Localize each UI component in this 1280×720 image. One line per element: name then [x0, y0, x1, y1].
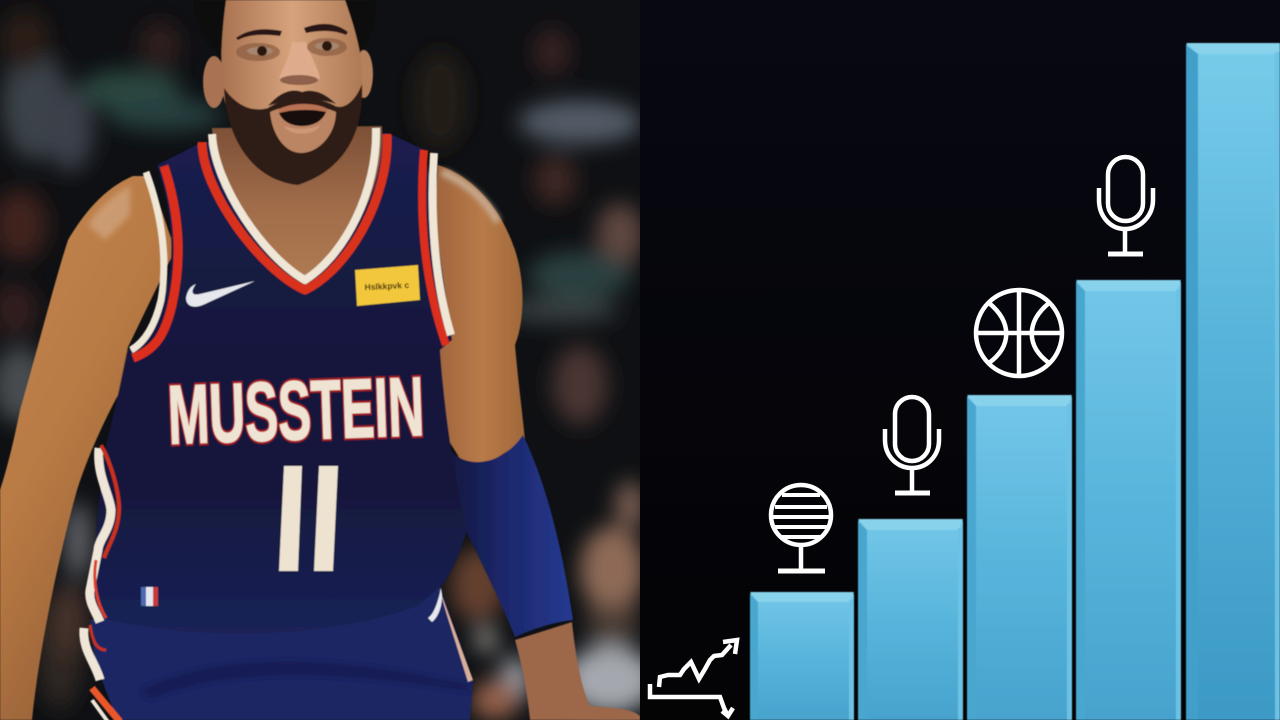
hair: [195, 0, 375, 60]
player figure: [0, 0, 640, 720]
left arm: [0, 176, 175, 720]
upper lip: [278, 104, 328, 114]
bar chart: five rising blue bars: [750, 43, 1280, 720]
right armhole red trim: [422, 150, 446, 345]
ears: [203, 56, 225, 108]
nose: [279, 42, 320, 84]
bar 1: [750, 592, 854, 720]
mouth: [279, 110, 326, 126]
chin skin: [270, 106, 336, 153]
shorts: [90, 587, 473, 720]
eyebrows: [236, 29, 282, 40]
jersey name: MUSSTEIN: [166, 359, 425, 462]
left armhole red trim: [133, 166, 178, 358]
jersey logo swoosh: [186, 281, 255, 307]
bar 4: [1076, 280, 1181, 720]
bar 5: [1186, 43, 1280, 720]
jersey number: 11: [279, 481, 338, 593]
collar cream trim: [212, 128, 376, 280]
icon: microphone on second bar: [885, 397, 939, 493]
shorts fold shadow: [140, 661, 470, 700]
league logo: [141, 587, 158, 606]
moustache: [268, 91, 336, 106]
beard: [224, 84, 362, 185]
right forearm and hand: [515, 622, 640, 720]
face: [221, 0, 362, 170]
sponsor patch: [355, 265, 420, 306]
left armhole cream trim: [131, 172, 164, 350]
icon: trend arrows: [650, 640, 737, 716]
bar 2: [858, 519, 963, 720]
right shoulder highlight: [442, 172, 498, 222]
photo panel: blurred arena crowd background: [0, 0, 656, 720]
eyes: [247, 47, 273, 55]
chest and neck: [212, 126, 382, 285]
arm sleeve: [450, 435, 573, 637]
icon: microphone on fourth bar: [1099, 157, 1153, 254]
icon: striped globe on stand: [771, 485, 831, 571]
shorts swoosh: [428, 588, 442, 622]
right armhole cream trim: [433, 153, 451, 335]
shorts right stripe: [439, 588, 473, 682]
collar red trim: [202, 134, 387, 290]
eye shadows: [236, 43, 280, 61]
chart panel: dark background: [640, 0, 1280, 720]
lower lip: [284, 125, 320, 134]
jersey name: [166, 359, 425, 462]
right arm: [430, 165, 525, 475]
sponsor patch: Hslkkpvk c: [364, 280, 410, 292]
icon: basketball: [976, 290, 1062, 376]
jersey name: MUSSTEIN: [166, 359, 425, 462]
bar 3: [967, 395, 1072, 720]
jersey body: [92, 133, 467, 634]
head: [195, 0, 375, 185]
jersey left side trim: [84, 445, 120, 720]
shoulder highlight: [88, 185, 130, 240]
